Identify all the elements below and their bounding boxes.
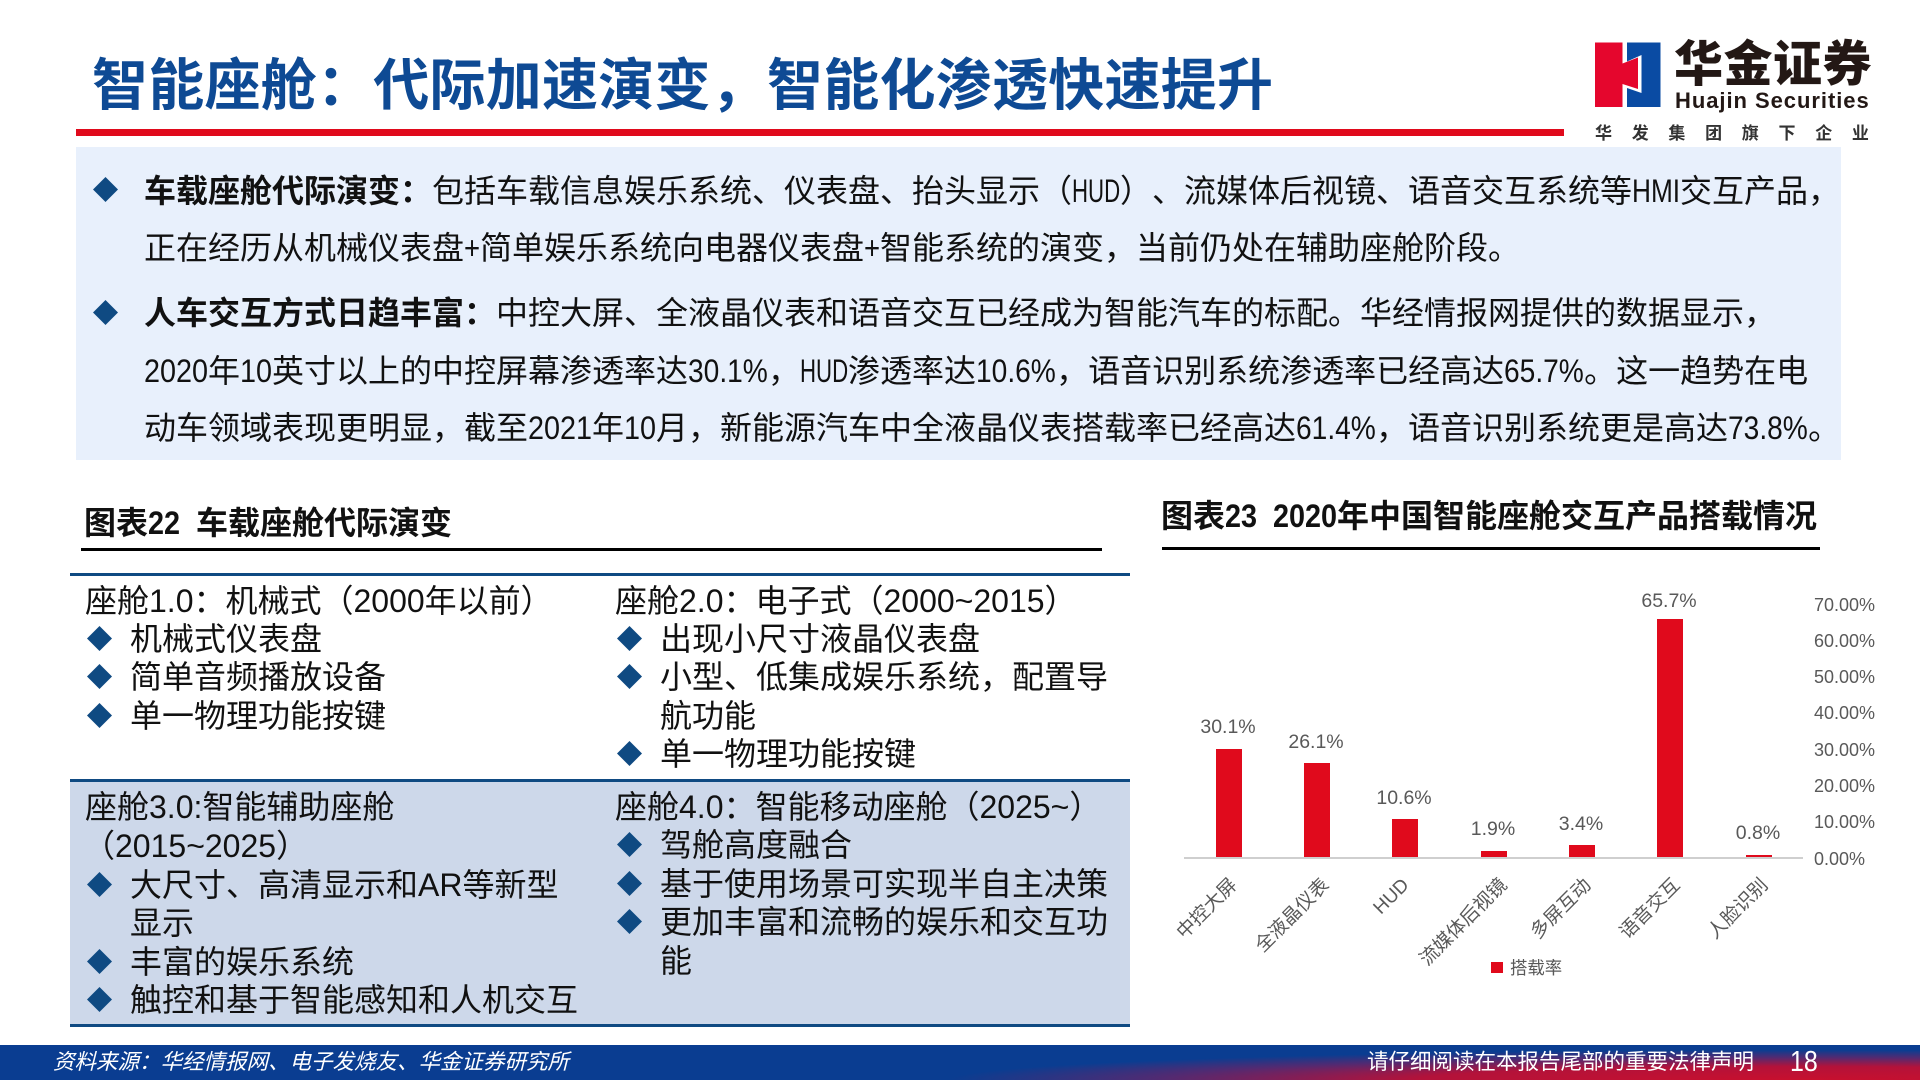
y axis labels: 40.00% — [1814, 703, 1875, 723]
point 1 line 1: HMI — [1632, 173, 1680, 209]
item — [617, 621, 980, 657]
cell: cockpit 3.0: 丰富的娱乐系统 — [130, 944, 354, 980]
data labels: 10.6% — [1376, 787, 1432, 809]
x axis category labels: 全液晶仪表 — [1251, 874, 1334, 957]
y axis labels: 10.00% — [1814, 812, 1875, 832]
page number: 18 — [1790, 1046, 1818, 1078]
data labels: 1.9% — [1471, 818, 1515, 840]
title: 智能座舱：代际加速演变，智能化渗透快速提升 — [92, 41, 1273, 122]
heading: figure 22: 图表 车载座舱代际演变 — [84, 498, 452, 544]
icon: red and blue logo mark — [1595, 42, 1660, 107]
y axis labels: 50.00% — [1814, 667, 1875, 687]
y axis labels: 20.00% — [1814, 776, 1875, 796]
title rule — [76, 129, 1564, 136]
point 2 line 2: 年 英寸以上的中控屏幕渗透率达 ， 渗透率达 ，语音识别系统渗透率已经高达 。这一趋势在电 — [208, 346, 1808, 392]
y axis labels: 70.00% — [1814, 595, 1875, 615]
panel: key points — [76, 147, 1841, 460]
x axis category labels: 人脸识别 — [1703, 874, 1773, 943]
point 2 line 2: 65.7% — [1504, 353, 1584, 389]
point 1 line 2: + — [864, 230, 880, 266]
heading rule: figure 22 — [81, 548, 1102, 551]
legal notice: 请仔细阅读在本报告尾部的重要法律声明 — [1367, 1045, 1754, 1076]
cell: cockpit 4.0: 基于使用场景可实现半自主决策 — [660, 866, 1108, 902]
heading: figure 23: 23 — [1225, 498, 1257, 534]
cell: cockpit 2.0: 单一物理功能按键 — [660, 736, 916, 772]
cell: cockpit 2.0: 小型、低集成娱乐系统，配置导 — [660, 659, 1108, 695]
cell heading 1.0: 座舱1.0：机械式（2000年以前） — [85, 583, 553, 619]
cell: cockpit 1.0: 机械式仪表盘 — [130, 621, 322, 657]
chart axis line — [1184, 857, 1803, 859]
footer band — [0, 1045, 1920, 1080]
point 2 line 2: 2020 — [144, 353, 208, 389]
point 2 line 3: 10 — [624, 410, 656, 446]
cell: cockpit 1.0: 单一物理功能按键 — [130, 698, 386, 734]
heading: figure 23: 图表 年中国智能座舱交互产品搭载情况 — [1161, 491, 1817, 537]
logo English name: Huajin Securities — [1675, 88, 1870, 113]
cell: cockpit 4.0: 驾舱高度融合 — [660, 827, 852, 863]
logo: Huajin Securities — [1595, 25, 1889, 144]
data labels: 65.7% — [1641, 590, 1697, 612]
data labels: 26.1% — [1288, 731, 1344, 753]
point 2 line 3: 73.8% — [1728, 410, 1808, 446]
cell: cockpit 3.0 — [83, 789, 578, 1018]
item — [87, 982, 578, 1018]
data labels: 3.4% — [1559, 813, 1603, 835]
point 2 line 2: 10 — [240, 353, 272, 389]
point 2 line 2: 30.1% — [688, 353, 768, 389]
cell: cockpit 4.0: 更加丰富和流畅的娱乐和交互功 — [660, 904, 1108, 940]
y axis labels: 60.00% — [1814, 631, 1875, 651]
bars — [1216, 619, 1772, 857]
cell: cockpit 3.0: 触控和基于智能感知和人机交互 — [130, 982, 578, 1018]
item — [617, 866, 1108, 902]
x axis category labels: 流媒体后视镜 — [1415, 874, 1512, 970]
cell: cockpit 4.0 — [615, 789, 1108, 979]
y axis labels: 0.00% — [1814, 849, 1865, 869]
item — [87, 944, 354, 980]
icon: diamond bullet 1 — [93, 177, 118, 202]
x axis category labels: HUD — [1370, 875, 1414, 919]
cell heading 4.0: 座舱4.0：智能移动座舱（2025~） — [615, 789, 1101, 825]
table: cockpit generations — [70, 573, 1130, 1027]
x axis category labels: 多屏互动 — [1526, 874, 1596, 943]
logo tagline: 华发集团旗下企业 — [1595, 119, 1889, 144]
item — [87, 659, 386, 695]
point 2 line 3: 动车领域表现更明显，截至 年 月，新能源汽车中全液晶仪表搭载率已经高达 ，语音识别系统更是高达 。 — [144, 403, 1840, 449]
x axis category labels: 中控大屏 — [1172, 874, 1242, 943]
cell: cockpit 2.0: 出现小尺寸液晶仪表盘 — [660, 621, 980, 657]
x axis category labels: 语音交互 — [1615, 874, 1685, 943]
point 1 line 1: 车载座舱代际演变：包括车载信息娱乐系统、仪表盘、抬头显示（ ）、流媒体后视镜、语音交互系统等 交互产品， — [144, 166, 1840, 212]
point 1 line 1: HUD — [1072, 173, 1120, 209]
data labels: 30.1% — [1200, 716, 1256, 738]
icon: diamond bullet 2 — [93, 300, 118, 325]
item — [617, 827, 852, 863]
cell: cockpit 1.0: 简单音频播放设备 — [130, 659, 386, 695]
item — [87, 621, 322, 657]
item — [617, 904, 1108, 979]
y axis labels: 30.00% — [1814, 740, 1875, 760]
data labels — [1200, 590, 1780, 844]
heading: figure 23: 2020 — [1273, 498, 1337, 534]
point 1 line 2: 正在经历从机械仪表盘 简单娱乐系统向电器仪表盘 智能系统的演变，当前仍处在辅助座舱阶段。 — [144, 223, 1520, 269]
source note: 资料来源：华经情报网、电子发烧友、华金证券研究所 — [53, 1045, 569, 1076]
cell: cockpit 2.0: 航功能 — [660, 698, 756, 734]
cell: cockpit 2.0 — [615, 583, 1108, 772]
point 2 line 1: 人车交互方式日趋丰富：中控大屏、全液晶仪表和语音交互已经成为智能汽车的标配。华经情报网提供的数据显示， — [144, 288, 1776, 334]
point 2 line 3: 61.4% — [1296, 410, 1376, 446]
data labels: 0.8% — [1736, 822, 1780, 844]
heading: figure 22: 22 — [148, 505, 180, 541]
y axis labels — [1814, 595, 1875, 869]
cell heading 3.0: 座舱3.0:智能辅助座舱 — [85, 789, 394, 825]
item — [87, 867, 558, 941]
point 2 line 3: 2021 — [528, 410, 592, 446]
point 2 line 2: 10.6% — [976, 353, 1056, 389]
row 2 background — [70, 779, 1130, 1024]
heading rule: figure 23 — [1162, 547, 1820, 550]
item — [617, 736, 916, 772]
point 1 line 2: + — [464, 230, 480, 266]
cell: cockpit 3.0: 大尺寸、高清显示和AR等新型 — [130, 867, 558, 903]
cell: cockpit 3.0: 显示 — [130, 905, 194, 941]
logo Chinese name: 华金证券 — [1674, 25, 1872, 96]
cell heading 3.0 period: （2015~2025） — [83, 828, 308, 864]
item — [87, 698, 386, 734]
x axis category labels — [1172, 874, 1773, 970]
bar chart: penetration rate — [1172, 590, 1875, 978]
item — [617, 659, 1108, 734]
cell heading 2.0: 座舱2.0：电子式（2000~2015） — [615, 583, 1077, 619]
chart legend: 搭载率 — [1510, 958, 1562, 978]
cell: cockpit 1.0 — [85, 583, 553, 734]
point 2 line 2: HUD — [800, 353, 848, 389]
cell: cockpit 4.0: 能 — [660, 943, 692, 979]
